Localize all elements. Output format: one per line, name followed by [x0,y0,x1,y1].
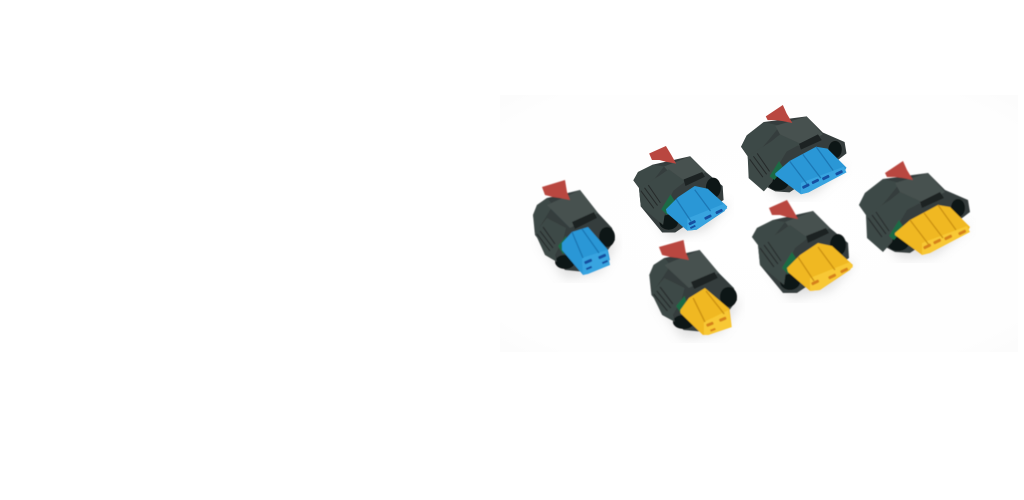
connector: yellow 4-way [859,161,970,258]
connector: blue 3-way [633,146,729,237]
connector: yellow 2-way [649,240,740,338]
connector: yellow 3-way [752,200,855,298]
connector: small blue 2-way [533,180,618,278]
connector: blue 4-way [741,105,847,197]
product photo panel [500,95,1018,352]
